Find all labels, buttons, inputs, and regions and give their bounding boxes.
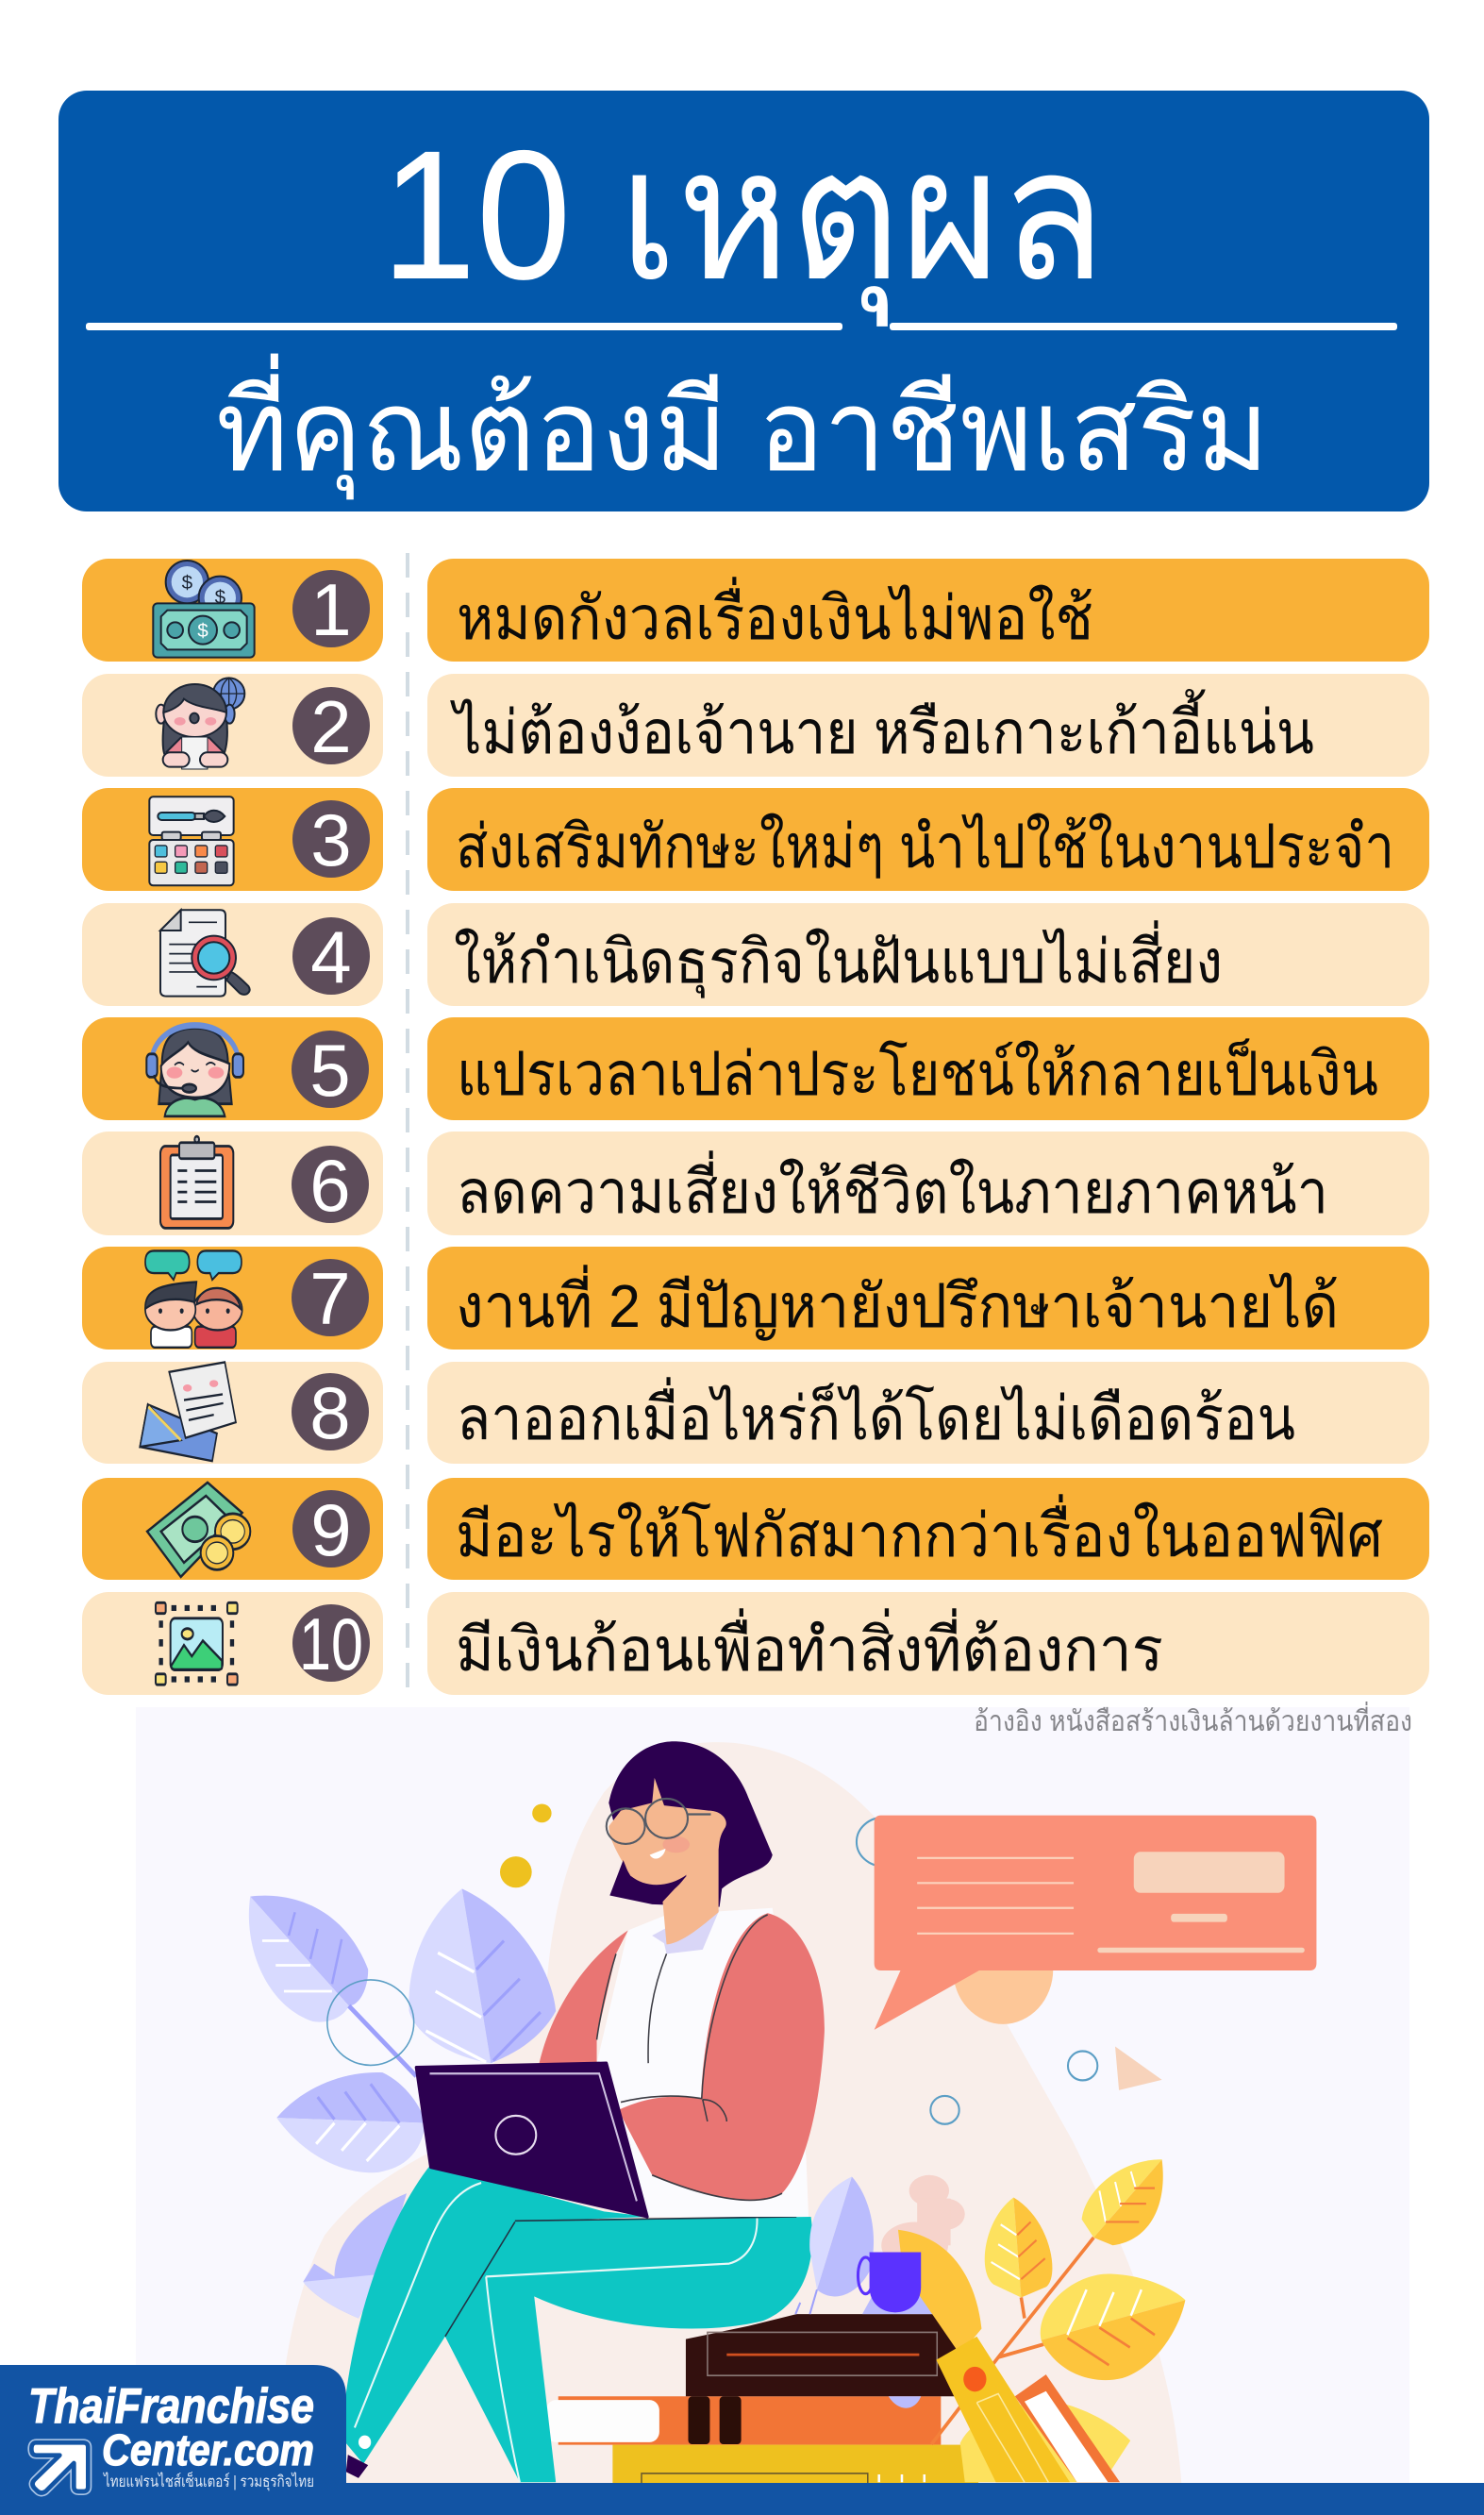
row 4 <box>82 903 1429 1006</box>
yellow folder <box>936 2337 1070 2482</box>
cup <box>858 2252 921 2312</box>
icon: girl with globe <box>156 678 244 769</box>
row 1: หมดกังวลเรื่องเงินไม่พอใช้ <box>457 577 1093 652</box>
illustration: person working on a laptop <box>249 1741 1181 2489</box>
orange and white book <box>1015 2374 1120 2482</box>
leaf middle left <box>276 2072 425 2172</box>
logo <box>0 2365 346 2496</box>
legs <box>342 2165 812 2482</box>
logo: ไทยแฟรนไชส์เซ็นเตอร์ | รวมธุรกิจไทย <box>102 2471 314 2491</box>
circle behind bubble <box>857 1818 911 1867</box>
row 3 <box>82 788 1429 891</box>
row 10 <box>82 1592 1429 1695</box>
laptop <box>416 2063 647 2217</box>
left sleeve <box>539 1931 628 2064</box>
icon: clipboard <box>160 1136 233 1228</box>
speech bubble <box>875 1816 1316 2030</box>
icon: two colleagues with speech bubbles <box>145 1250 242 1348</box>
icon: money: $ <box>215 586 226 608</box>
leaf lower left <box>303 2193 407 2319</box>
hair <box>609 1741 773 1907</box>
row 6: 6 <box>309 1144 351 1227</box>
row 10: มีเงินก้อนเพื่อทำสิ่งที่ต้องการ <box>456 1608 1163 1684</box>
row 4: 4 <box>310 915 352 998</box>
row 8 <box>82 1362 1429 1464</box>
illustration: right side decorations <box>795 1816 1316 2482</box>
yellow book ticks <box>879 2474 925 2482</box>
row 5: 5 <box>309 1029 351 1112</box>
collar <box>652 1909 720 1953</box>
row 7 <box>82 1247 1429 1350</box>
subtitle: ที่คุณต้องมี อาชีพเสริม <box>216 353 1269 500</box>
yellow leaf right <box>1041 2273 1185 2380</box>
icon: headset girl <box>146 1025 243 1116</box>
illustration background <box>136 1707 1409 2490</box>
background blob <box>276 1742 1181 2485</box>
row 2: 2 <box>310 685 352 768</box>
logo: Center.com <box>102 2425 314 2474</box>
icon: document and magnifier <box>160 910 250 997</box>
row 7: 7 <box>309 1257 351 1340</box>
leaf top centre <box>409 1888 556 2063</box>
row 2 <box>82 674 1429 777</box>
glasses <box>607 1799 710 1844</box>
peach shapes <box>881 2175 965 2269</box>
logo arrow <box>31 2442 88 2492</box>
decorative circle <box>327 1980 414 2065</box>
row 2: ไม่ต้องง้อเจ้านาย หรือเกาะเก้าอี้แน่น <box>449 689 1314 766</box>
icon: banknote and coins <box>147 1483 250 1577</box>
title: 10 เหตุผล <box>381 112 1106 327</box>
row 5 <box>82 1017 1429 1120</box>
row 1: 1 <box>310 568 352 651</box>
row 5: แปรเวลาเปล่าประโยชน์ให้กลายเป็นเงิน <box>457 1039 1378 1108</box>
yellow leaf top right <box>1082 2159 1163 2245</box>
row 6: ลดความเสี่ยงให้ชีวิตในภายภาคหน้า <box>457 1150 1328 1226</box>
row 9: มีอะไรให้โฟกัสมากกว่าเรื่องในออฟฟิศ <box>456 1494 1383 1569</box>
icon: money <box>153 561 255 658</box>
orange leaf behind stack <box>898 2230 981 2355</box>
lavender leaf near cup <box>795 2176 935 2408</box>
torso <box>597 1908 809 2217</box>
stacked books left part <box>546 2314 978 2489</box>
citation: อ้างอิง หนังสือสร้างเงินล้านด้วยงานที่สอง <box>974 1702 1412 1737</box>
row 9 <box>82 1478 1429 1580</box>
row 6 <box>82 1132 1429 1235</box>
small circles and triangle <box>930 2052 1097 2124</box>
icon: money: $ <box>197 620 208 642</box>
stems <box>931 2238 1093 2444</box>
header banner <box>58 91 1429 511</box>
face and neck <box>609 1778 726 1944</box>
row 3: 3 <box>310 798 352 881</box>
right sleeve <box>619 1913 825 2200</box>
row 7: งานที่ 2 มีปัญหายังปรึกษาเจ้านายได้ <box>456 1265 1339 1340</box>
icon: money: $ <box>182 572 193 594</box>
row 8: 8 <box>309 1371 351 1454</box>
yellow dots <box>500 1803 552 1887</box>
row 9: 9 <box>310 1488 352 1571</box>
leaf top left <box>249 1896 416 2076</box>
yellow leaf centre <box>985 2198 1052 2297</box>
icon: paint palette <box>149 796 234 885</box>
row 8: ลาออกเมื่อไหร่ก็ได้โดยไม่เดือดร้อน <box>457 1377 1295 1452</box>
icon: envelope with letter <box>140 1362 236 1461</box>
row 1 <box>82 559 1429 662</box>
yellow leaf bottom <box>960 2402 1130 2482</box>
footer bar <box>0 2483 1484 2515</box>
logo: ThaiFranchise <box>28 2379 314 2434</box>
row 4: ให้กำเนิดธุรกิจในฝันแบบไม่เสี่ยง <box>454 920 1223 998</box>
icon: picture frame <box>156 1602 238 1685</box>
row 10: 10 <box>299 1602 363 1685</box>
